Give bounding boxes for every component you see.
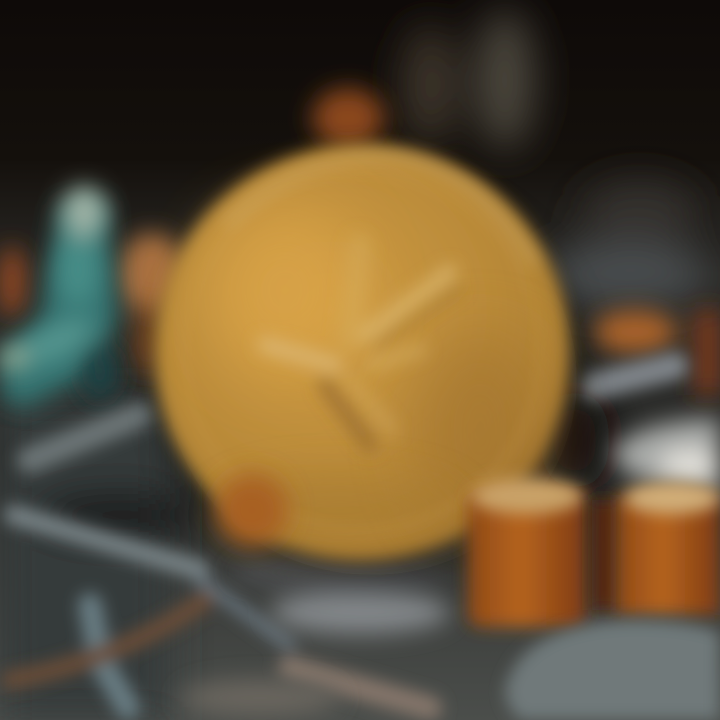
right background haze bbox=[540, 180, 710, 305]
copper cylinder: front bbox=[468, 478, 586, 627]
coin highlight bbox=[205, 205, 365, 375]
orange knob behind coin bbox=[312, 88, 384, 148]
copper cylinder gap shadow bbox=[592, 500, 616, 610]
coin emboss: star lines bbox=[265, 245, 460, 445]
left tabletop bbox=[0, 390, 610, 720]
upper blurred bottles bbox=[402, 10, 535, 150]
small orange knob on coin bbox=[216, 474, 288, 546]
copper cylinder: right bbox=[616, 482, 720, 615]
coin rim bbox=[225, 155, 535, 265]
right cylinder top bbox=[624, 482, 720, 514]
grey plate lower right bbox=[505, 620, 720, 720]
coin lower right shading bbox=[410, 330, 550, 530]
right orange objects bbox=[593, 310, 720, 395]
coin disc bbox=[154, 144, 570, 560]
coin shadow bbox=[167, 185, 577, 575]
teal object bbox=[0, 200, 118, 410]
cylinder top bbox=[471, 478, 583, 514]
right cylinder body bbox=[616, 495, 720, 615]
teal highlights bbox=[0, 186, 118, 400]
lower centre grey plates bbox=[180, 558, 450, 716]
coin lower edge shading bbox=[220, 475, 460, 545]
gold coin bbox=[154, 144, 570, 560]
left orange objects bbox=[0, 233, 186, 378]
lower left grey streaks bbox=[10, 415, 430, 708]
cylinder body bbox=[468, 492, 586, 627]
coin faint rings bbox=[184, 174, 540, 530]
white plate right bbox=[612, 418, 720, 492]
right grey bar bbox=[576, 349, 691, 403]
